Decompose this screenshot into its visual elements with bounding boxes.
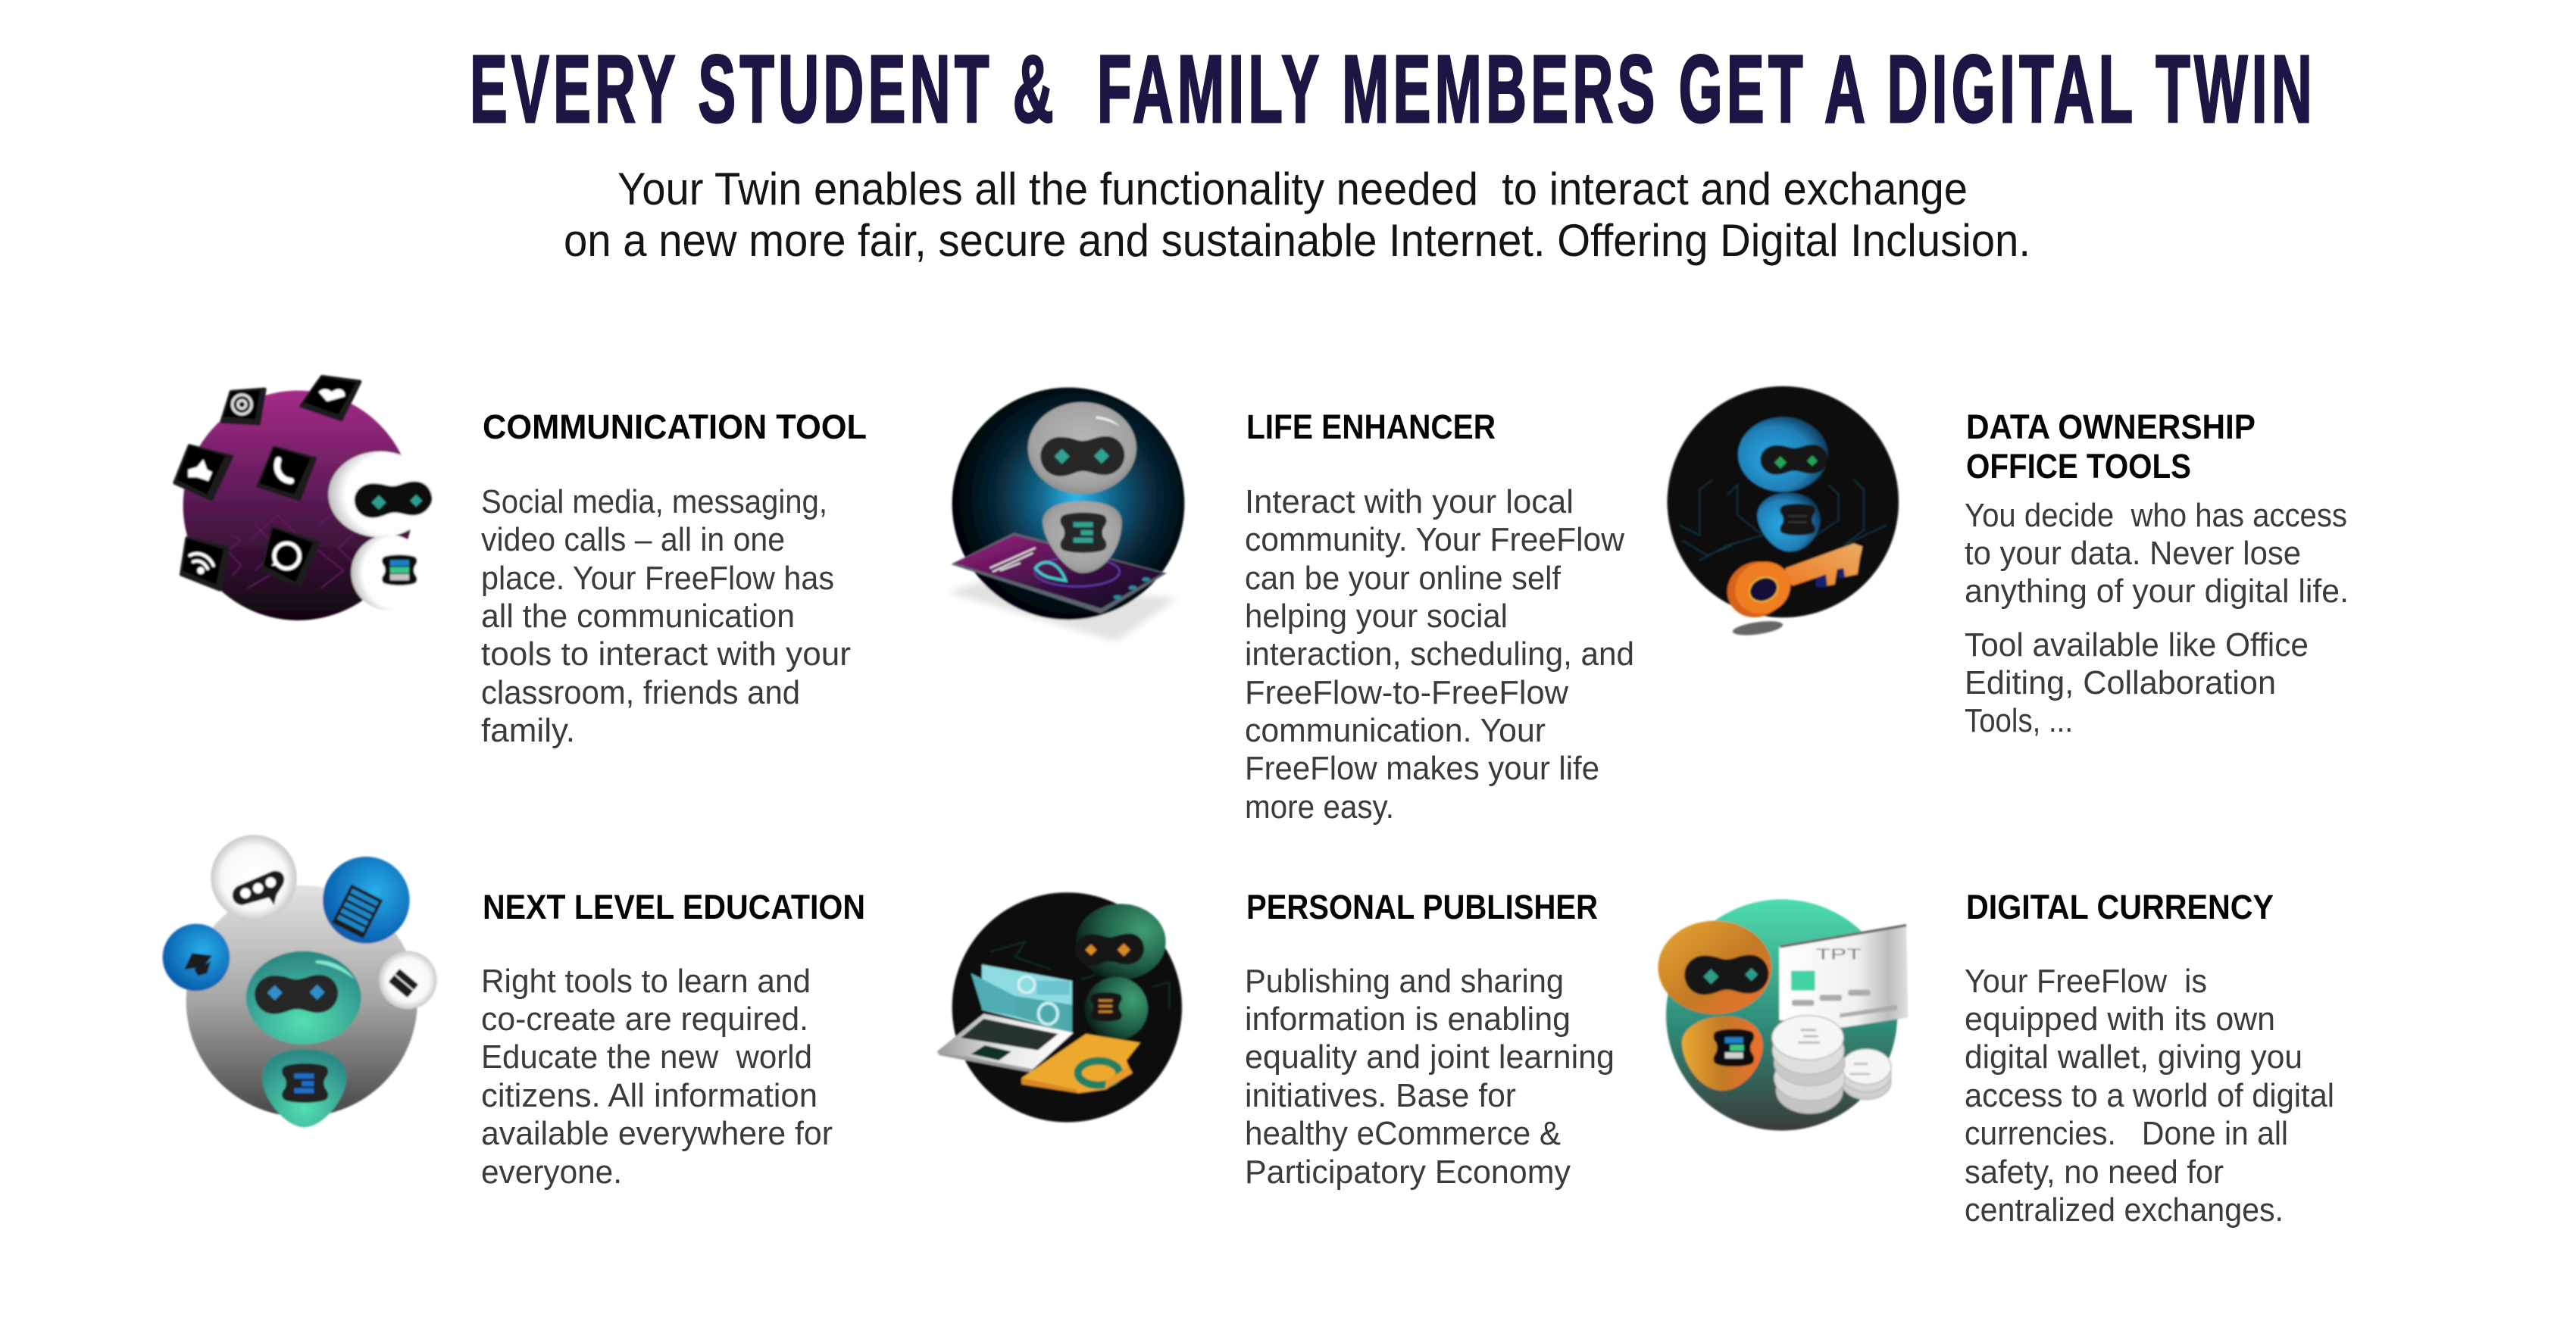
body: life enhancer: helping your social: [1245, 598, 1508, 635]
body: data ownership: Tools, ...: [1965, 702, 2073, 739]
body: life enhancer: Interact with your local: [1245, 483, 1574, 520]
body: life enhancer: FreeFlow-to-FreeFlow: [1245, 674, 1568, 711]
body: next level education: citizens. All information: [481, 1077, 818, 1114]
body: next level education: Right tools to learn and: [481, 963, 811, 1000]
heading: data ownership office tools: [1966, 408, 2256, 486]
body: data ownership: You decide who has access: [1965, 497, 2347, 534]
panel: personal publisher: [937, 888, 1615, 1191]
panel: next level education: [163, 835, 865, 1191]
body: digital currency: access to a world of digital: [1965, 1077, 2334, 1114]
panel: data ownership: [1668, 386, 2349, 739]
body: communication tool: [481, 483, 851, 749]
subtitle: [564, 164, 2030, 266]
heading: digital currency: DIGITAL CURRENCY: [1966, 888, 2274, 926]
body: life enhancer: community. Your FreeFlow: [1245, 521, 1624, 558]
icon: communication robot with app cubes: [175, 376, 433, 620]
body: life enhancer: more easy.: [1245, 788, 1394, 826]
body: digital currency: equipped with its own: [1965, 1001, 2275, 1038]
icon: orange robot with card and coins: TPT: [1816, 946, 1862, 963]
body: personal publisher: information is enabling: [1245, 1001, 1571, 1038]
body: communication tool: tools to interact with your: [481, 635, 851, 673]
subtitle: on a new more fair, secure and sustainable Internet. Offering Digital Inclusion.: [564, 215, 2030, 266]
icon: green robot with laptop and folder: [937, 892, 1182, 1123]
heading: next level education: NEXT LEVEL EDUCATION: [483, 888, 865, 926]
body: personal publisher: Participatory Economy: [1245, 1154, 1571, 1191]
body: data ownership: Tool available like Office: [1965, 626, 2309, 664]
body: data ownership: [1965, 497, 2349, 739]
icon: grey robot over phone: [947, 388, 1184, 642]
body: data ownership: Editing, Collaboration: [1965, 664, 2276, 701]
body: personal publisher: equality and joint learning: [1245, 1038, 1615, 1076]
body: data ownership: to your data. Never lose: [1965, 535, 2301, 572]
heading: communication tool: COMMUNICATION TOOL: [483, 408, 867, 446]
panel: life enhancer: [947, 388, 1634, 826]
body: personal publisher: Publishing and sharing: [1245, 963, 1564, 1000]
body: next level education: Educate the new world: [481, 1038, 812, 1076]
body: communication tool: place. Your FreeFlow has: [481, 560, 834, 597]
body: life enhancer: [1245, 483, 1634, 826]
icon: teal robot with education bubbles: [163, 835, 437, 1127]
body: communication tool: family.: [481, 712, 575, 749]
body: personal publisher: initiatives. Base for: [1245, 1077, 1516, 1114]
heading: personal publisher: PERSONAL PUBLISHER: [1246, 888, 1598, 926]
body: personal publisher: [1245, 963, 1615, 1191]
icon: orange robot with card and coins: [1658, 899, 1908, 1131]
body: next level education: [481, 963, 833, 1191]
icon: blue robot with key: [1668, 386, 1899, 638]
body: next level education: everyone.: [481, 1154, 622, 1191]
body: next level education: available everywhere for: [481, 1115, 833, 1152]
body: digital currency: centralized exchanges.: [1965, 1191, 2284, 1229]
panel: digital currency: [1658, 888, 2334, 1229]
body: communication tool: classroom, friends and: [481, 674, 800, 711]
body: digital currency: [1965, 963, 2334, 1229]
subtitle: Your Twin enables all the functionality needed to interact and exchange: [617, 164, 1968, 214]
body: digital currency: digital wallet, giving you: [1965, 1038, 2302, 1076]
body: life enhancer: FreeFlow makes your life: [1245, 750, 1599, 787]
body: communication tool: video calls – all in one: [481, 521, 785, 558]
heading: life enhancer: LIFE ENHANCER: [1246, 408, 1496, 446]
body: life enhancer: can be your online self: [1245, 560, 1562, 597]
body: personal publisher: healthy eCommerce &: [1245, 1115, 1561, 1152]
body: digital currency: Your FreeFlow is: [1965, 963, 2207, 1000]
panel: communication tool: [175, 376, 867, 749]
body: communication tool: all the communication: [481, 598, 795, 635]
body: communication tool: Social media, messaging,: [481, 483, 827, 520]
heading: data ownership office tools: DATA OWNERSHIP: [1966, 408, 2256, 446]
body: life enhancer: communication. Your: [1245, 712, 1546, 749]
body: life enhancer: interaction, scheduling, and: [1245, 635, 1634, 673]
body: data ownership: anything of your digital life.: [1965, 573, 2349, 610]
heading: data ownership office tools: OFFICE TOOLS: [1966, 447, 2191, 486]
body: digital currency: currencies. Done in all: [1965, 1115, 2288, 1152]
body: next level education: co-create are required.: [481, 1001, 808, 1038]
body: digital currency: safety, no need for: [1965, 1154, 2224, 1191]
